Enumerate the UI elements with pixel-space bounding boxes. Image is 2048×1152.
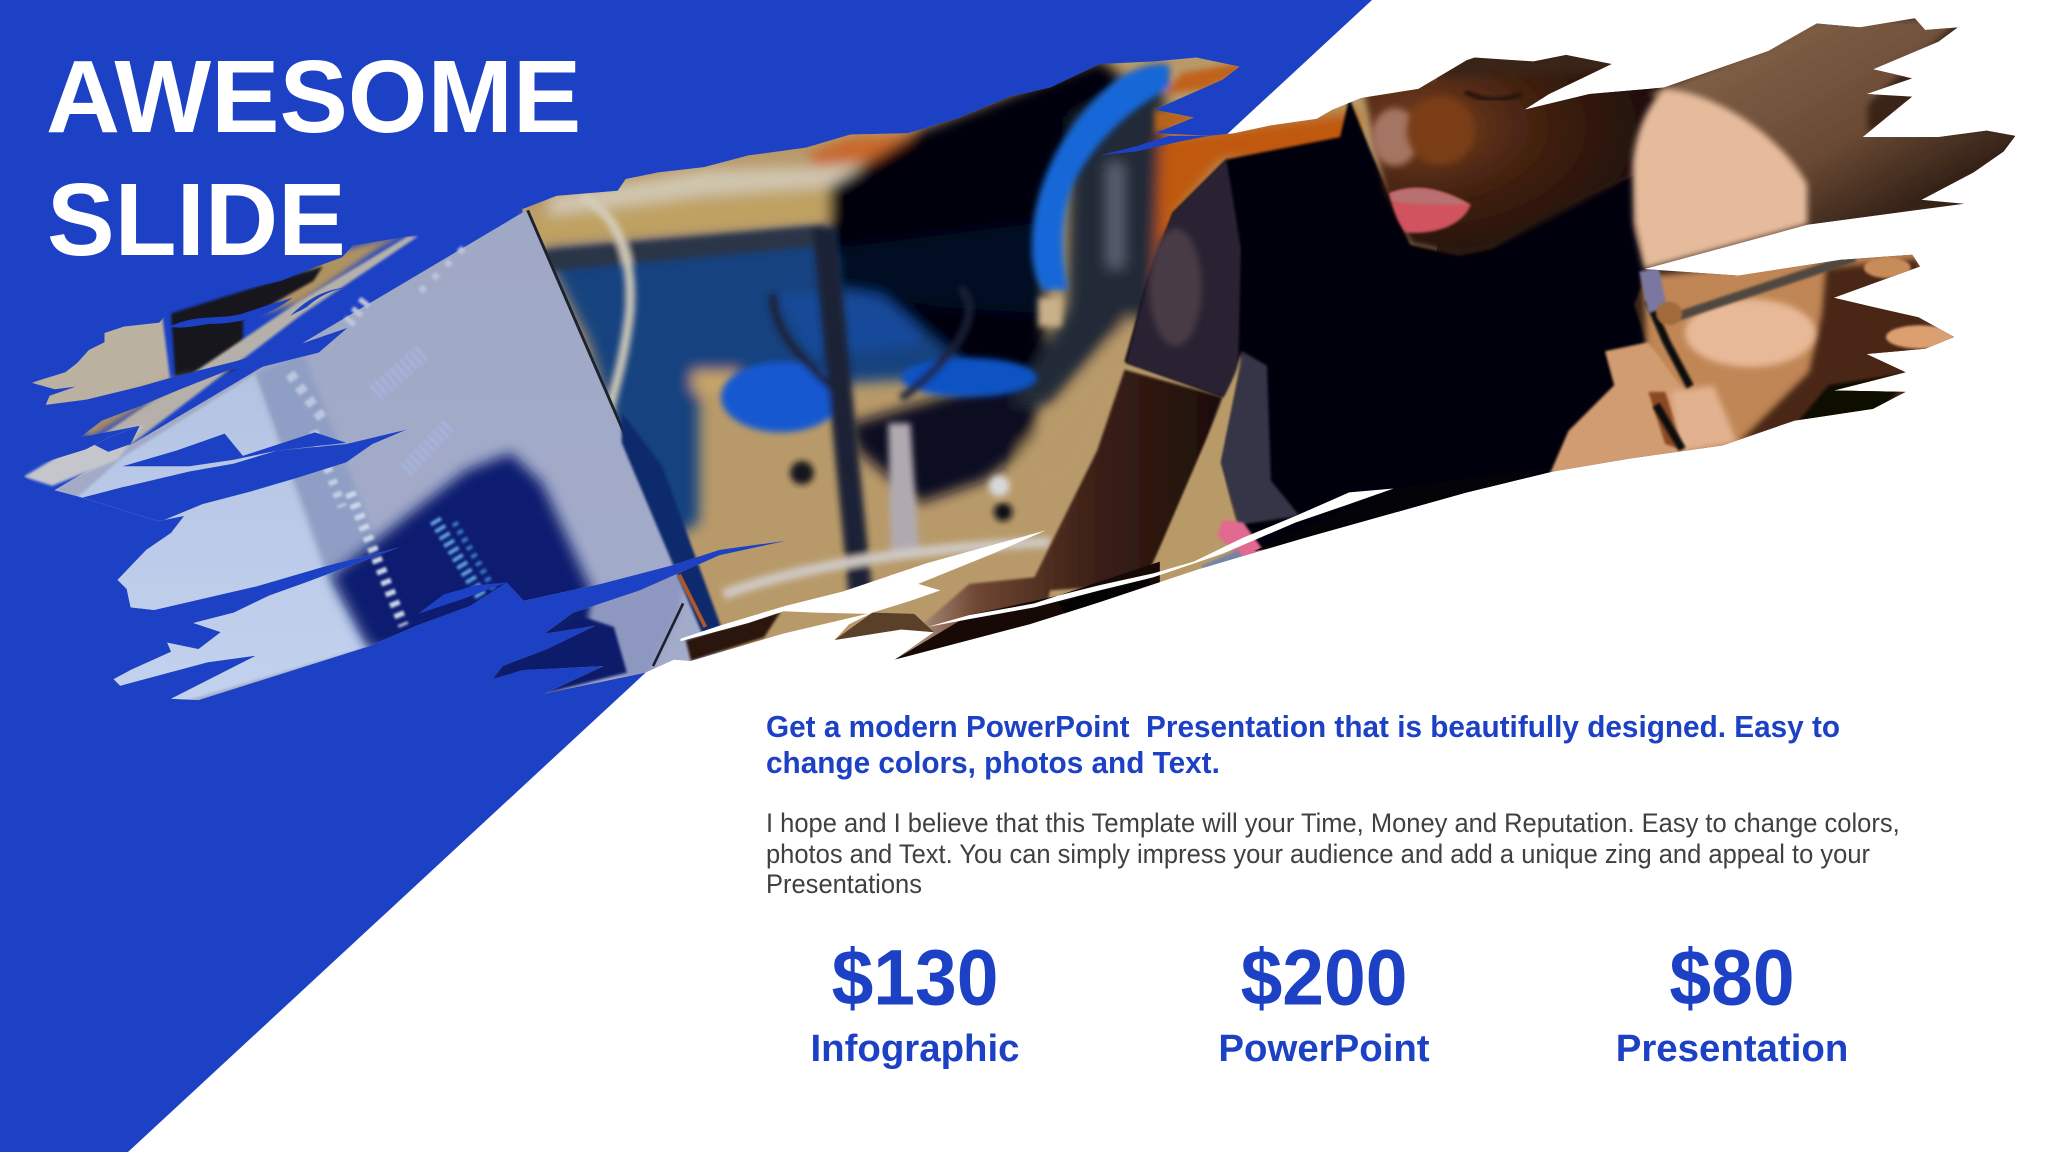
desk top items	[549, 165, 879, 216]
dark navy brush bottom	[492, 614, 627, 694]
cheek highlight	[1371, 108, 1418, 166]
screen text rows	[290, 248, 499, 626]
pink skirt	[1217, 520, 1263, 559]
blue gash 2 lower	[82, 430, 406, 522]
body paragraph: I hope and I believe that this Template will your Time, Money and Reputation. Easy to change colors,	[766, 808, 1900, 838]
seated person dark torso	[829, 59, 1123, 379]
blue gash upper screen	[290, 287, 346, 316]
desk top wood	[528, 187, 829, 248]
stat: $80 Presentation	[1616, 933, 1848, 1070]
body paragraph: photos and Text. You can simply impress your audience and add a unique zing and appeal to your	[766, 838, 1870, 868]
blue hole top left	[170, 298, 293, 328]
chair base dark	[849, 366, 1045, 503]
desk leg	[812, 229, 872, 596]
orange brush tip	[1162, 63, 1243, 94]
side lace	[1220, 351, 1300, 525]
blue chair back	[1032, 65, 1169, 290]
title line 1: AWESOME	[46, 39, 581, 154]
dark laptop foot	[686, 611, 781, 661]
man's nose and mouth	[1672, 385, 1737, 452]
man's cheek highlight	[1685, 299, 1816, 367]
dark monitor behind	[171, 266, 323, 392]
floor notch	[692, 371, 739, 392]
title	[46, 39, 581, 277]
subheading	[766, 710, 1840, 780]
stat: $200 PowerPoint: PowerPoint	[1218, 1027, 1430, 1070]
man's lower face	[1643, 248, 1933, 457]
woman's dark top	[1125, 98, 1647, 555]
subheading: Get a modern PowerPoint Presentation that is beautifully designed. Easy to	[766, 710, 1840, 744]
white gash 1	[680, 530, 1046, 641]
man's hand	[1549, 342, 1688, 475]
blue chair gash	[1100, 136, 1209, 155]
white gash 2	[927, 488, 1394, 627]
denim and blue under desk	[544, 221, 970, 539]
blue gash 2 upper	[123, 432, 346, 466]
woman's lips	[1390, 188, 1471, 233]
body paragraph: Presentations	[766, 869, 922, 899]
dark area right of leg	[836, 222, 1045, 313]
body paragraph	[766, 808, 1900, 899]
dark lower brush band	[895, 562, 1160, 660]
base behind men	[1436, 18, 2016, 501]
bright window area	[78, 374, 368, 705]
laptop hinge line	[528, 210, 683, 569]
man's hair	[1648, 18, 2018, 229]
man's ear and beard	[1737, 259, 1959, 444]
laptop screen	[54, 210, 724, 700]
desk frame	[539, 225, 825, 272]
chair column	[888, 423, 920, 558]
eye	[1465, 91, 1522, 100]
chair right grey back	[1010, 65, 1176, 405]
lower right screen	[580, 574, 683, 678]
stat: $130 Infographic	[810, 933, 1020, 1070]
stat: $130 Infographic: $130	[832, 933, 998, 1021]
office floor background	[522, 39, 1437, 718]
left tan background	[31, 313, 171, 408]
photo in brush-stroke mask	[24, 18, 2016, 700]
man's forehead	[1633, 89, 1808, 269]
stat: $200 PowerPoint: $200	[1241, 933, 1407, 1021]
blue wedge on lid	[80, 426, 140, 452]
subheading: change colors, photos and Text.	[766, 746, 1220, 780]
lace sleeve	[1126, 159, 1241, 397]
floor right of chair	[1019, 313, 1139, 503]
stat: $200 PowerPoint	[1218, 933, 1430, 1070]
silver laptop rim	[78, 236, 418, 460]
chair loop arm	[773, 287, 969, 398]
stat: $130 Infographic: Infographic	[810, 1027, 1020, 1070]
floor right of arm	[1144, 355, 1242, 584]
stat: $80 Presentation: $80	[1669, 933, 1795, 1021]
orange wall	[1155, 111, 1358, 300]
woman's face	[1361, 72, 1665, 255]
woman's arm	[895, 370, 1223, 660]
title line 2: SLIDE	[47, 162, 346, 277]
wheels	[790, 461, 814, 485]
screen dark blue panel	[332, 453, 614, 692]
phone-like strip	[622, 413, 724, 635]
white cable	[581, 196, 630, 431]
chair seats	[721, 362, 841, 432]
man's glasses	[1648, 300, 1690, 449]
orange hand	[806, 133, 920, 167]
chair foot	[724, 542, 1050, 594]
mid column	[256, 353, 418, 647]
stat: $80 Presentation: Presentation	[1616, 1027, 1848, 1070]
